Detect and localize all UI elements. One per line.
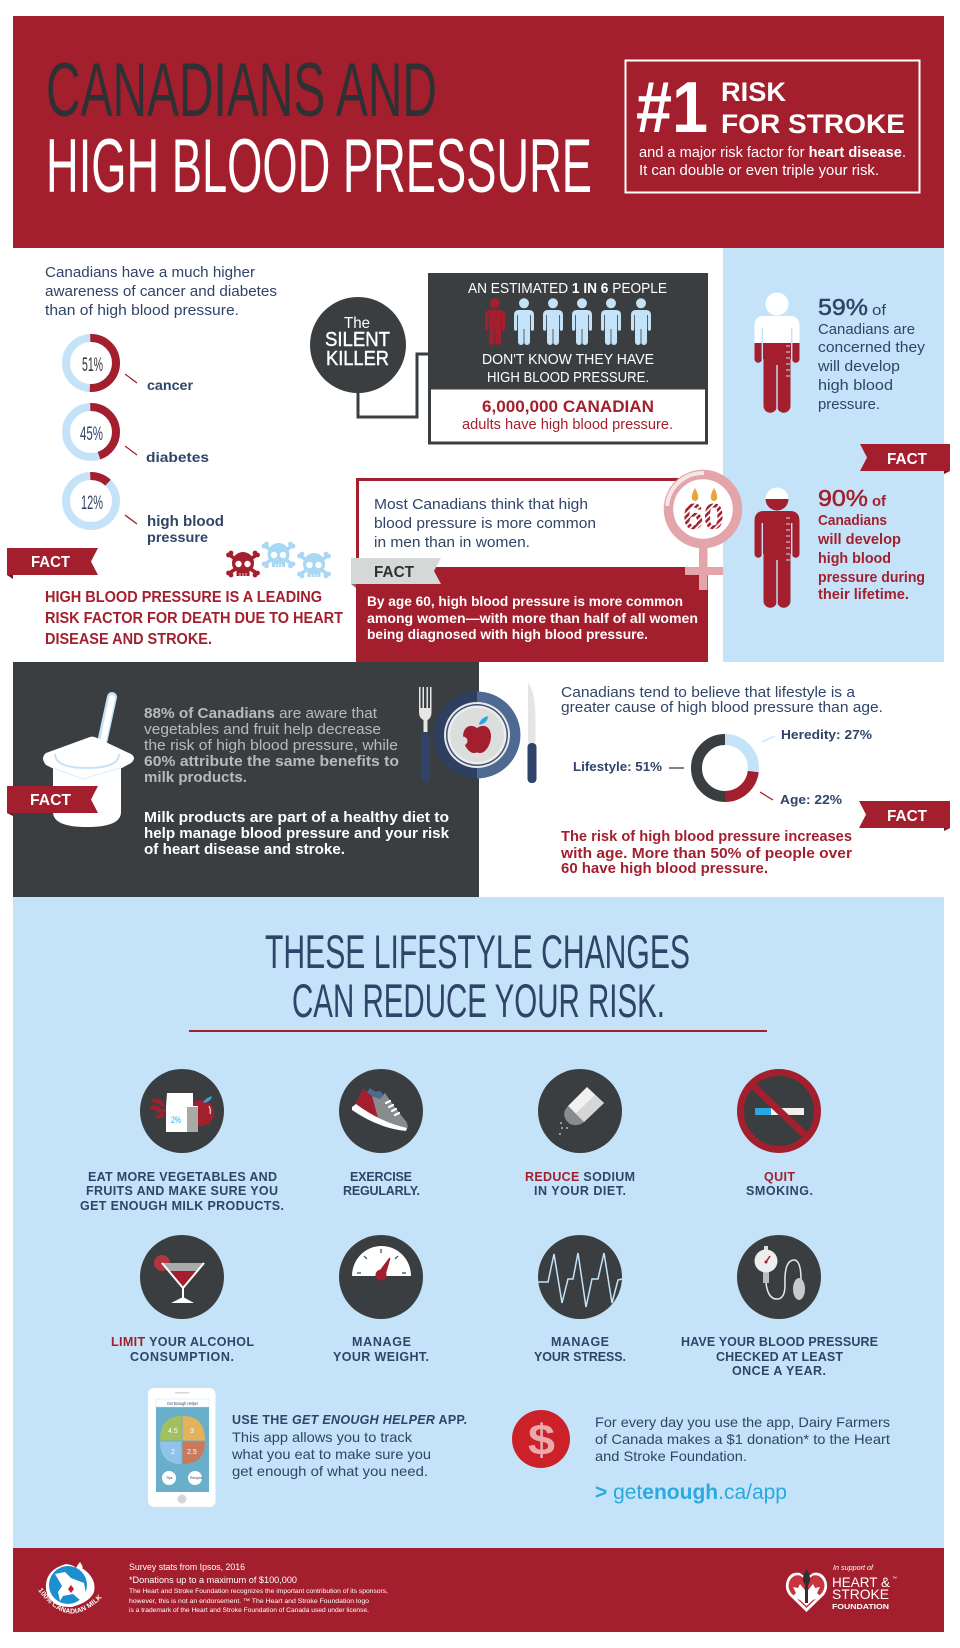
text: lifestyle belief: greater cause of high blood pressure than age. — [561, 700, 883, 716]
connector arrow line — [358, 354, 430, 417]
text: get enough helper app: what you eat to make sure you — [231, 1446, 431, 1462]
box: by age 60 — [356, 567, 708, 662]
fact ribbon: leading risk factor: FACT — [31, 554, 70, 571]
item: eat more vegetables: EAT MORE VEGETABLES AND — [88, 1170, 277, 1184]
box: most Canadians think: in men than in women. — [374, 534, 530, 551]
title: HIGH BLOOD PRESSURE — [46, 124, 592, 209]
text: survey source and fine print: *Donations up to a maximum of $100,000 — [129, 1575, 297, 1586]
fact text: leading risk factor — [45, 589, 343, 648]
text: risk increases with age: 60 have high blood pressure. — [561, 861, 768, 877]
item: limit alcohol: CONSUMPTION. — [130, 1350, 234, 1364]
text: risk increases with age: with age. More than 50% of people over — [560, 846, 852, 862]
text: get enough helper app — [231, 1413, 467, 1479]
stat: 90% will develop: their lifetime. — [818, 586, 909, 603]
text: risk increases with age — [560, 829, 852, 877]
logo: Heart and Stroke Foundation: FOUNDATION — [832, 1602, 889, 1611]
donut chart: causes: Lifestyle: 51% — [573, 759, 662, 774]
item: eat more vegetables: GET ENOUGH MILK PRODUCTS. — [80, 1199, 284, 1213]
donut chart: cancer 51% — [66, 338, 194, 393]
donut chart: high blood pressure 12%: 12% — [81, 493, 103, 514]
box: 1 in 6 people: DON'T KNOW THEY HAVE — [482, 351, 654, 368]
box: by age 60: among women—with more than half of all women — [367, 610, 698, 626]
donut chart: causes: Age: 22% — [780, 792, 842, 807]
heading: lifestyle changes: THESE LIFESTYLE CHANGES — [265, 925, 690, 978]
fact ribbon: milk — [7, 786, 98, 816]
text: app donation: of Canada makes a $1 donation* to the Heart — [595, 1431, 890, 1447]
icon: heartbeat line — [538, 1253, 622, 1307]
icon: running shoe — [352, 1088, 408, 1131]
heading: lifestyle changes — [189, 925, 767, 1032]
text: survey source and fine print: The Heart and Stroke Foundation recognizes the important contribution of its sponsors, — [129, 1588, 388, 1595]
awareness intro text: than of high blood pressure. — [45, 302, 239, 319]
box: 6,000,000 Canadian adults: adults have high blood pressure. — [462, 416, 673, 433]
icon: phone with app: 3 — [190, 1428, 194, 1435]
icon: phone with app — [148, 1388, 216, 1507]
logo: 100% Canadian Milk — [38, 1562, 102, 1614]
item: eat more vegetables — [80, 1069, 284, 1213]
donut chart: causes: Heredity: 27% — [781, 727, 872, 742]
stat: 90% will develop: 90% — [818, 485, 868, 511]
icon: person 90% filled — [754, 488, 800, 608]
box: most Canadians think: Most Canadians think that high — [374, 496, 588, 513]
item: check blood pressure: HAVE YOUR BLOOD PRESSURE — [681, 1335, 878, 1349]
text: get enough helper app: USE THE GET ENOUGH HELPER APP. — [232, 1413, 467, 1427]
box: by age 60: being diagnosed with high blood pressure. — [367, 626, 648, 642]
fact ribbon: gray — [351, 558, 441, 588]
box: most Canadians think: blood pressure is more common — [374, 515, 596, 532]
item: quit smoking: QUIT — [764, 1170, 795, 1184]
text: 88% of Canadians: the risk of high blood pressure, while — [144, 738, 398, 754]
text: survey source and fine print: however, this is not an endorsement. ™ The Heart and Stroke Foundation logo — [129, 1598, 369, 1605]
item: exercise: REGULARLY. — [343, 1184, 420, 1198]
text: get enough helper app: This app allows you to track — [232, 1429, 413, 1445]
stat: 90% will develop: pressure during — [818, 569, 925, 586]
stat: 90% will develop: high blood — [818, 550, 891, 567]
awareness intro text — [45, 264, 277, 319]
awareness intro text: Canadians have a much higher — [45, 264, 255, 281]
icon: yogurt cup with spoon — [43, 697, 134, 827]
box: 6,000,000 Canadian adults: 6,000,000 CANADIAN — [482, 397, 654, 416]
item: manage weight — [333, 1235, 429, 1364]
donut chart: high blood pressure 12%: high blood — [147, 514, 224, 530]
item: limit alcohol: LIMIT YOUR ALCOHOL — [111, 1335, 254, 1349]
text: milk products healthy diet: of heart disease and stroke. — [144, 842, 345, 858]
text: app donation — [595, 1414, 890, 1464]
icon: salt shaker — [559, 1087, 604, 1135]
item: reduce sodium: REDUCE SODIUM — [525, 1170, 635, 1184]
logo: Heart and Stroke Foundation: STROKE — [832, 1586, 889, 1602]
box: 1 in 6 people: HIGH BLOOD PRESSURE. — [487, 369, 649, 386]
text: get enough helper app: get enough of what you need. — [232, 1463, 428, 1479]
icon: row of six people — [485, 298, 651, 346]
stat: 90% will develop: will develop — [817, 531, 901, 548]
text: milk products healthy diet — [144, 810, 450, 858]
stat: 59% concerned — [817, 294, 926, 413]
heading: lifestyle changes: CAN REDUCE YOUR RISK. — [292, 974, 665, 1027]
stat: 90% will develop — [817, 485, 925, 603]
box: 1 in 6 people: AN ESTIMATED 1 IN 6 PEOPLE — [468, 280, 667, 297]
item: eat more vegetables: FRUITS AND MAKE SURE YOU — [86, 1184, 278, 1198]
icon: milk carton apple wheat — [149, 1093, 214, 1132]
fact ribbon: milk: FACT — [30, 792, 71, 809]
item: manage stress — [534, 1235, 626, 1364]
icon: dollar coin — [512, 1410, 570, 1468]
icon: phone with app: Recipes — [190, 1476, 203, 1480]
icon: person 59% filled — [754, 292, 800, 413]
link: getenough app: > getenough.ca/app — [595, 1481, 787, 1504]
text: 88% of Canadians: vegetables and fruit help decrease — [144, 722, 381, 738]
icon: blood pressure cuff gauge — [754, 1246, 805, 1300]
callout: number one risk for stroke: FOR STROKE — [721, 109, 905, 139]
item: reduce sodium: IN YOUR DIET. — [534, 1184, 626, 1198]
callout: number one risk for stroke: RISK — [721, 77, 786, 107]
icon: female symbol with 60 candles — [664, 470, 742, 590]
item: quit smoking — [740, 1072, 818, 1198]
item: exercise — [339, 1069, 423, 1198]
stat: 59% concerned: Canadians are — [818, 321, 915, 338]
panel: milk products — [7, 662, 536, 897]
item: check blood pressure — [681, 1235, 878, 1378]
panel: lifestyle changes — [13, 897, 944, 1548]
stat: 59% concerned: high blood — [818, 377, 893, 394]
stat: 59% concerned: 59% — [818, 294, 868, 320]
icon: milk carton apple wheat: 2% — [171, 1115, 181, 1125]
fact ribbon: lifetime — [860, 444, 950, 474]
fact text: leading risk factor: HIGH BLOOD PRESSURE IS A LEADING — [45, 589, 322, 606]
fact text: leading risk factor: DISEASE AND STROKE. — [45, 631, 212, 648]
text: lifestyle belief: Canadians tend to believe that lifestyle is a — [561, 685, 856, 701]
donut chart: diabetes 45%: 45% — [80, 424, 103, 445]
item: quit smoking: SMOKING. — [746, 1184, 813, 1198]
stat: 59% concerned: of — [872, 302, 887, 319]
donut chart: cancer 51%: 51% — [82, 355, 103, 376]
box: by age 60: By age 60, high blood pressure is more common — [367, 593, 683, 609]
icon: three skulls — [226, 542, 331, 578]
logo: Heart and Stroke Foundation — [786, 1565, 897, 1612]
item: manage weight: YOUR WEIGHT. — [333, 1350, 429, 1364]
stat: 59% concerned: pressure. — [818, 396, 880, 413]
icon: cocktail — [154, 1255, 204, 1303]
logo: Heart and Stroke Foundation: ™ — [892, 1576, 897, 1582]
callout: number one risk for stroke: #1 — [636, 68, 708, 148]
icon: phone with app: 2.5 — [187, 1449, 197, 1456]
fact text: leading risk factor: RISK FACTOR FOR DEATH DUE TO HEART — [45, 610, 343, 627]
item: manage stress: YOUR STRESS. — [534, 1350, 626, 1364]
text: 88% of Canadians: milk products. — [144, 770, 247, 786]
item: limit alcohol — [111, 1235, 254, 1364]
panel: silent killer — [310, 273, 708, 443]
text: survey source and fine print: is a trademark of the Heart and Stroke Foundation of Canada used under license. — [129, 1607, 369, 1614]
logo: 100% Canadian Milk: 100% CANADIAN MILK — [38, 1588, 102, 1614]
donut chart: high blood pressure 12%: pressure — [147, 529, 208, 545]
stat: 59% concerned: will develop — [817, 358, 900, 375]
badge: the silent killer: The — [344, 315, 370, 332]
text: risk increases with age: The risk of high blood pressure increases — [561, 829, 852, 845]
donut chart: high blood pressure 12% — [66, 476, 224, 545]
text: milk products healthy diet: Milk products are part of a healthy diet to — [144, 810, 449, 826]
title: CANADIANS AND — [46, 48, 437, 133]
panel: causes of high blood pressure — [560, 685, 950, 877]
donut chart: diabetes 45%: diabetes — [146, 449, 209, 465]
donut chart: diabetes 45% — [66, 407, 209, 465]
logo: Heart and Stroke Foundation: HEART & — [832, 1574, 891, 1590]
title — [46, 48, 592, 209]
fact ribbon: age — [859, 801, 950, 831]
badge: the silent killer: SILENT — [325, 329, 390, 351]
fact ribbon: gray: FACT — [374, 564, 414, 581]
icon: female symbol with 60 candles: 60 — [683, 496, 724, 537]
text: app donation: For every day you use the app, Dairy Farmers — [595, 1414, 890, 1430]
header banner — [13, 16, 944, 248]
icon: no smoking — [752, 1085, 807, 1137]
icon: phone with app: Get Enough Helper — [167, 1401, 198, 1407]
text: milk products healthy diet: help manage blood pressure and your risk — [144, 826, 450, 842]
icon: plate fork knife apple — [419, 683, 536, 783]
stat: 59% concerned: concerned they — [818, 339, 926, 356]
text: 88% of Canadians: 60% attribute the same benefits to — [144, 754, 399, 770]
box: 1 in 6 people — [428, 273, 708, 388]
text: 88% of Canadians — [144, 706, 399, 786]
item: manage stress: MANAGE — [551, 1335, 609, 1349]
panel: women and high blood pressure — [351, 470, 742, 662]
fact ribbon: lifetime: FACT — [887, 451, 927, 468]
fact ribbon: leading risk factor — [7, 548, 98, 579]
box: 6,000,000 Canadian adults — [430, 388, 706, 443]
icon: phone with app: 2 — [171, 1449, 175, 1456]
text: lifestyle belief — [561, 685, 883, 716]
text: survey source and fine print: Survey stats from Ipsos, 2016 — [129, 1562, 245, 1573]
item: exercise: EXERCISE — [350, 1170, 412, 1184]
icon: phone with app: Tips — [166, 1476, 173, 1480]
footer — [13, 1548, 944, 1632]
text: 88% of Canadians: 88% of Canadians are aware that — [144, 706, 377, 722]
item: reduce sodium — [525, 1069, 635, 1198]
text: survey source and fine print — [129, 1562, 388, 1614]
panel: concern statistics — [723, 248, 950, 662]
callout: number one risk for stroke: It can double or even triple your risk. — [639, 163, 879, 179]
callout: number one risk for stroke — [626, 60, 920, 192]
callout: number one risk for stroke: and a major risk factor for heart disease. — [639, 145, 906, 161]
text: app donation: and Stroke Foundation. — [595, 1448, 747, 1464]
box: most Canadians think — [358, 480, 690, 567]
donut chart: causes — [573, 727, 872, 807]
donut chart: cancer 51%: cancer — [147, 377, 194, 393]
badge: the silent killer — [310, 297, 406, 393]
item: manage weight: MANAGE — [352, 1335, 411, 1349]
logo: Heart and Stroke Foundation: In support of — [833, 1565, 874, 1572]
fact ribbon: age: FACT — [887, 808, 927, 825]
icon: scale gauge — [352, 1246, 411, 1280]
badge: the silent killer: KILLER — [326, 348, 389, 370]
item: check blood pressure: CHECKED AT LEAST — [716, 1350, 843, 1364]
stat: 90% will develop: of — [872, 493, 887, 510]
icon: dollar coin: $ — [528, 1416, 555, 1465]
stat: 90% will develop: Canadians — [818, 512, 887, 529]
awareness intro text: awareness of cancer and diabetes — [45, 283, 277, 300]
item: check blood pressure: ONCE A YEAR. — [732, 1364, 826, 1378]
panel: awareness of conditions — [45, 264, 277, 545]
icon: phone with app: 4.5 — [168, 1428, 178, 1435]
